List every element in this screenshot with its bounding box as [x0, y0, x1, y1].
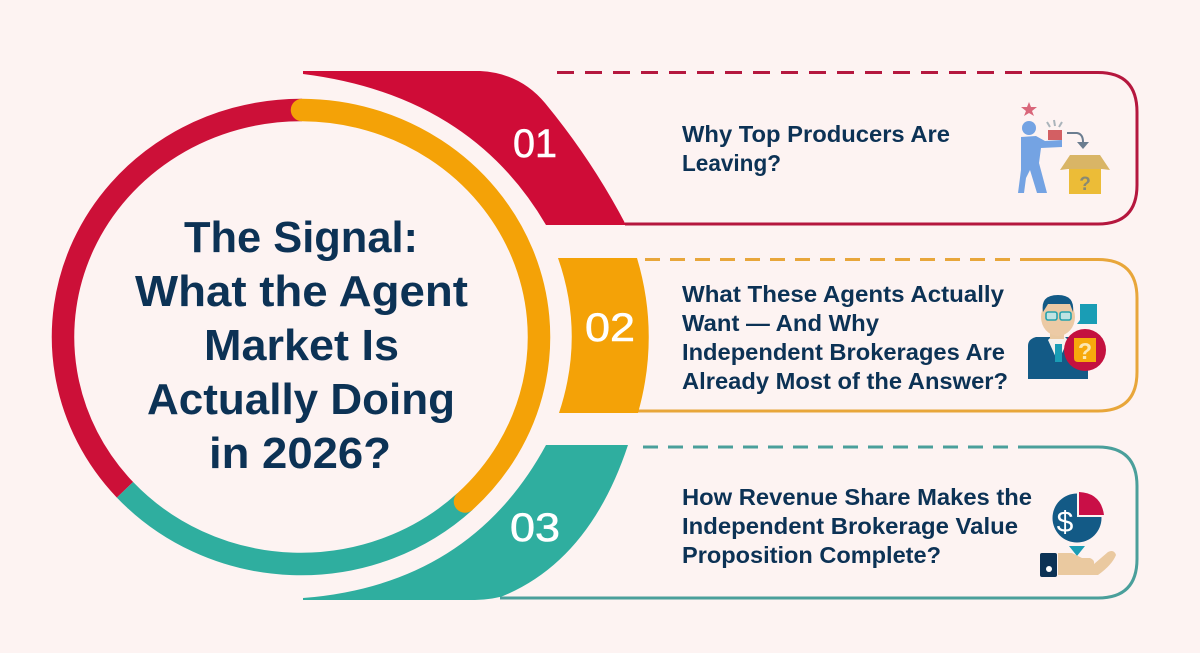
band 3	[303, 445, 628, 600]
card 3 text: Proposition Complete?	[682, 542, 941, 568]
card 3 text: How Revenue Share Makes the	[682, 484, 1032, 510]
card 2 text	[682, 281, 1008, 394]
icon: revenue pie on hand	[1040, 491, 1116, 577]
title: What the Agent	[135, 267, 468, 316]
central ring	[63, 110, 539, 564]
icon: person moving box	[1018, 102, 1110, 195]
card 3 outline	[500, 447, 1137, 598]
title: Market Is	[204, 321, 399, 370]
card 1 text: Why Top Producers Are	[682, 121, 950, 147]
title: The Signal:	[184, 213, 418, 262]
number 03: 03	[510, 506, 560, 550]
card 3 text	[682, 484, 1032, 568]
number 01: 01	[513, 122, 557, 166]
icon: person moving box: ?	[1079, 174, 1091, 195]
band 2	[558, 258, 649, 413]
icon: revenue pie on hand: $	[1057, 506, 1074, 539]
card 2 text: Want — And Why	[682, 310, 879, 336]
card 2 text: Independent Brokerages Are	[682, 339, 1005, 365]
card 2 text: What These Agents Actually	[682, 281, 1004, 307]
number 02: 02	[585, 306, 635, 350]
panel 1: why top producers are leaving	[303, 71, 1137, 225]
card 3 text: Independent Brokerage Value	[682, 513, 1018, 539]
panel 2: what these agents want	[558, 258, 1137, 413]
band 1	[303, 71, 626, 225]
card 1 text	[682, 121, 950, 176]
title: in 2026?	[209, 429, 391, 478]
title: Actually Doing	[147, 375, 455, 424]
icon: agent with question: ?	[1078, 338, 1092, 364]
card 2 text: Already Most of the Answer?	[682, 368, 1008, 394]
panel 3: how revenue share completes proposition	[303, 445, 1137, 600]
title	[135, 213, 468, 478]
card 1 outline	[557, 72, 1137, 224]
icon: agent with question	[1028, 295, 1106, 379]
card 2 outline	[637, 260, 1137, 411]
card 1 text: Leaving?	[682, 150, 781, 176]
